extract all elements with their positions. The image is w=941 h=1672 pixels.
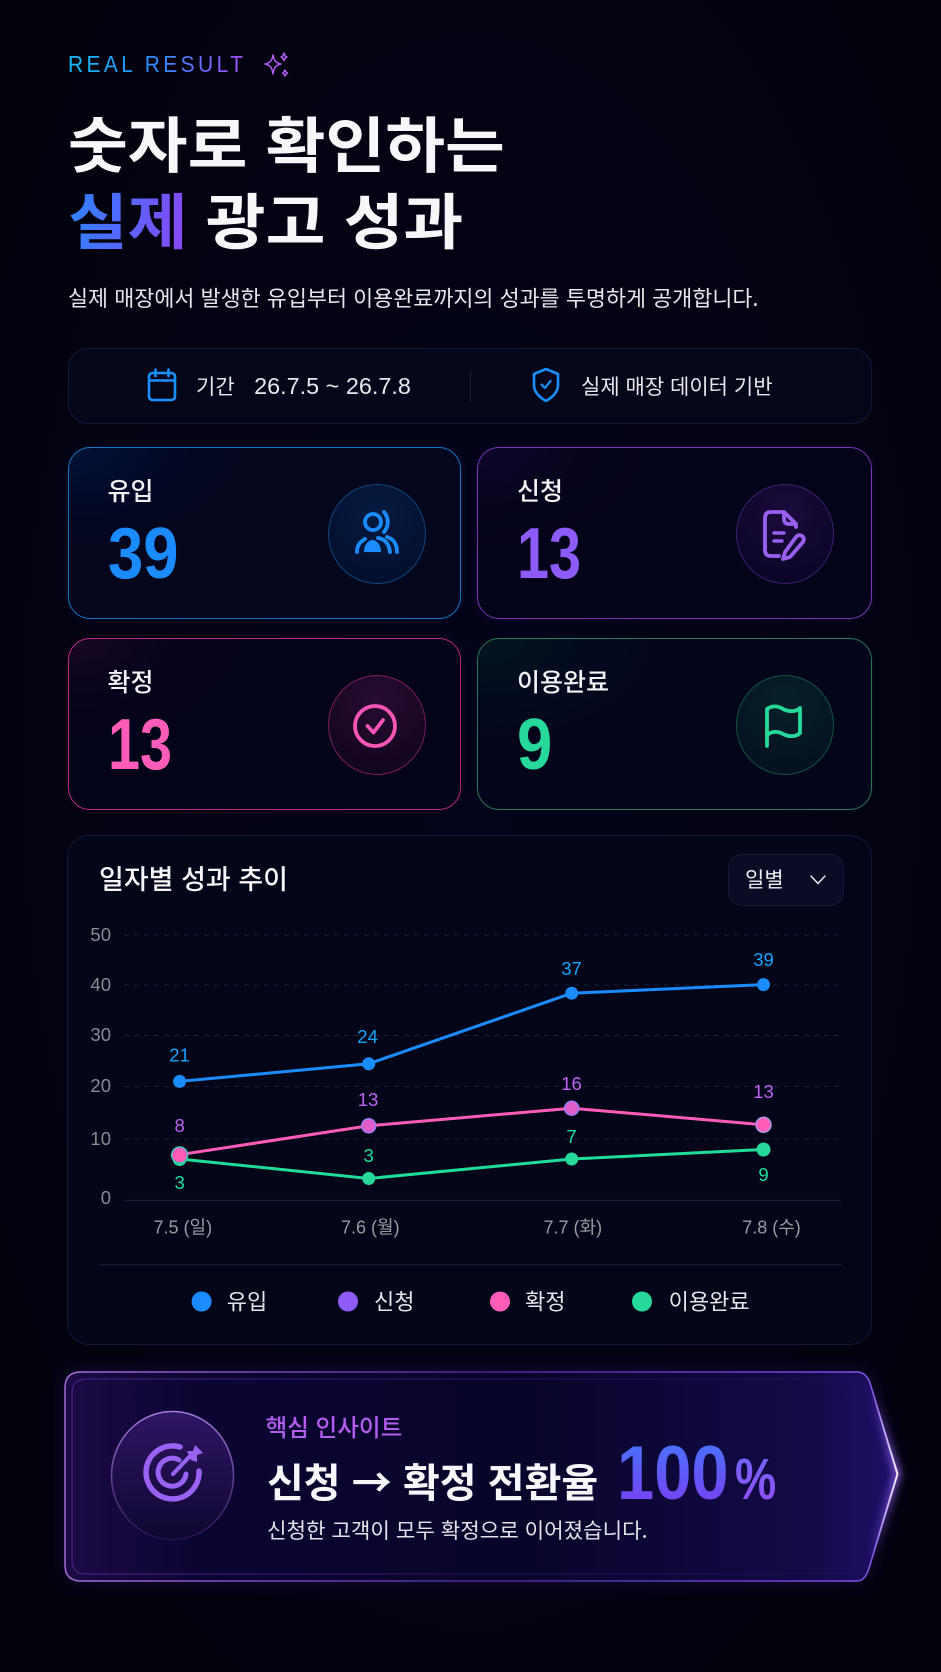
icon: shield xyxy=(532,368,560,402)
data labels: 신청 xyxy=(174,1073,774,1136)
y axis labels: 10 xyxy=(90,1128,111,1149)
series: 유입 xyxy=(173,978,770,1088)
icon: chevron xyxy=(810,875,826,884)
card: 확정 xyxy=(68,638,460,810)
icon: calendar xyxy=(148,368,176,402)
label: 신청 xyxy=(517,472,563,508)
data labels: 유입: 24 xyxy=(357,1026,378,1047)
icon: users xyxy=(328,484,426,584)
dropdown: 일별 xyxy=(728,854,844,906)
x axis labels: 7.5 (일) xyxy=(154,1218,212,1238)
insight label: 핵심 인사이트 xyxy=(266,1409,402,1443)
data labels: 유입: 37 xyxy=(561,958,582,979)
label: 유입 xyxy=(108,472,154,508)
title: 숫자로 확인하는 xyxy=(68,97,505,185)
legend: 신청 xyxy=(374,1290,414,1314)
card: 이용완료 xyxy=(477,638,872,810)
data labels: 신청: 13 xyxy=(358,1089,378,1110)
x axis labels xyxy=(154,1218,801,1238)
data labels: 이용완료: 3 xyxy=(364,1145,374,1166)
title xyxy=(68,97,505,261)
icon badge: target xyxy=(112,1412,234,1540)
data source text: 실제 매장 데이터 기반 xyxy=(581,371,773,401)
y axis labels: 50 xyxy=(90,924,111,945)
y axis labels: 40 xyxy=(90,974,111,995)
value: 39 xyxy=(108,514,178,594)
data labels: 이용완료 xyxy=(174,1126,769,1193)
y axis labels: 30 xyxy=(90,1024,111,1045)
title: 실제 광고 성과 xyxy=(68,174,463,261)
series: 이용완료 xyxy=(173,1142,771,1185)
data labels: 신청: 16 xyxy=(561,1073,582,1094)
value: 9 xyxy=(517,705,552,785)
period text: 기간 26.7.5 ~ 26.7.8 xyxy=(196,371,411,401)
card: 신청 xyxy=(477,447,872,619)
value digits: 100 xyxy=(617,1431,729,1516)
dropdown label: 일별 xyxy=(745,864,784,894)
icon: flag xyxy=(736,675,834,775)
data labels: 신청: 13 xyxy=(753,1081,774,1102)
card: 유입 xyxy=(68,447,460,619)
x axis labels: 7.6 (월) xyxy=(341,1218,400,1238)
y axis labels xyxy=(90,924,111,1208)
chart heading: 일자별 성과 추이 xyxy=(99,858,288,897)
eyebrow: REAL RESULT: REAL RESULT xyxy=(68,51,246,77)
series: 신청 and 확정 xyxy=(172,1101,771,1163)
value: 13 xyxy=(108,705,172,785)
data labels: 이용완료: 9 xyxy=(758,1164,769,1185)
panel: period info bar xyxy=(68,348,872,424)
subtitle: 실제 매장에서 발생한 유입부터 이용완료까지의 성과를 투명하게 공개합니다. xyxy=(68,282,759,313)
y axis labels: 0 xyxy=(101,1187,111,1208)
legend: 유입 xyxy=(227,1290,267,1314)
percent sign: % xyxy=(735,1447,776,1512)
insight description: 신청한 고객이 모두 확정으로 이어졌습니다. xyxy=(267,1514,648,1545)
label: 확정 xyxy=(108,663,154,699)
legend: 확정 xyxy=(525,1290,565,1314)
legend: 이용완료 xyxy=(669,1290,750,1314)
data labels: 이용완료: 3 xyxy=(174,1172,185,1193)
insight headline: 신청 → 확정 전환율 xyxy=(267,1451,598,1509)
panel: key insight arrow banner xyxy=(58,1364,907,1588)
y axis labels: 20 xyxy=(90,1075,111,1096)
data labels: 이용완료: 7 xyxy=(566,1126,577,1147)
data labels: 유입: 39 xyxy=(753,949,774,970)
insight value: 100% xyxy=(617,1431,776,1516)
legend xyxy=(192,1290,750,1314)
panel: daily trend chart xyxy=(67,835,872,1345)
data labels: 유입: 21 xyxy=(169,1044,190,1066)
icon: sparkle xyxy=(264,52,288,77)
label: 이용완료 xyxy=(517,663,609,699)
data labels: 신청: 8 xyxy=(174,1115,185,1136)
x axis labels: 7.7 (화) xyxy=(544,1218,602,1238)
icon: check circle xyxy=(328,675,426,775)
x axis labels: 7.8 (수) xyxy=(742,1218,801,1238)
value: 13 xyxy=(517,514,581,594)
data labels: 유입 xyxy=(169,949,774,1066)
icon: document with pen xyxy=(736,484,834,584)
